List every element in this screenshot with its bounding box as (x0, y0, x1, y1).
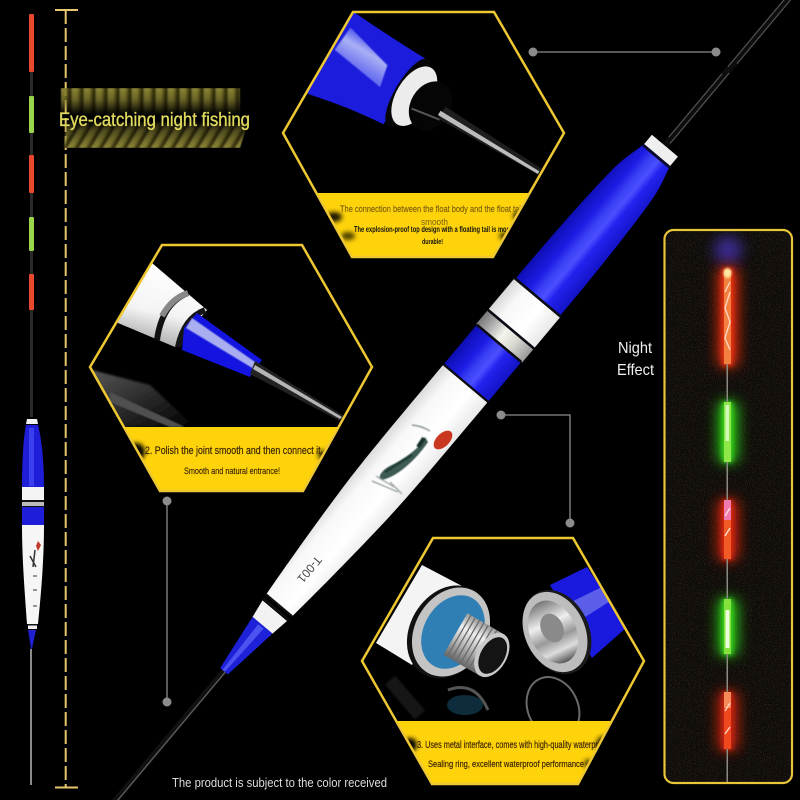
top caption text: The connection between the float body and the float tail is (340, 204, 530, 215)
top caption text: durable! (422, 237, 443, 246)
middle caption text (145, 445, 323, 476)
lower collar rings (263, 594, 292, 620)
lit red segment two (724, 500, 731, 559)
panel frame (664, 230, 792, 783)
photo of metal interface (376, 565, 624, 721)
hexagon panel: polished joint (85, 245, 380, 491)
night effect panel (664, 230, 792, 783)
lower blue band (443, 325, 521, 402)
ink painting and seal on float (372, 425, 456, 494)
blue cone tip (214, 617, 273, 680)
banner: eye-catching night fishing (59, 88, 250, 148)
lit red segment one (724, 268, 732, 364)
photo of polished joint (92, 263, 344, 427)
model number: T-001 (294, 553, 325, 586)
bottom caption text: Sealing ring, excellent waterproof performance (428, 759, 584, 770)
antenna thread (726, 364, 728, 783)
lower white body (257, 365, 487, 624)
white band (488, 278, 561, 348)
banner: eye-catching night fishing: Eye-catching night fishing (59, 110, 250, 131)
red seal (430, 427, 456, 453)
top white ring (644, 135, 678, 167)
dimension line with end caps (55, 10, 78, 788)
night effect label: Night (618, 340, 652, 357)
night effect label (617, 340, 654, 379)
hexagon panel: metal interface (360, 538, 650, 784)
top caption text: The explosion-proof top design with a floating tail is more (354, 225, 512, 234)
bottom caption text: 3. Uses metal interface, comes with high-quality waterproof (417, 740, 608, 751)
middle caption text: Smooth and natural entrance! (184, 466, 280, 476)
top caption text: smooth (421, 217, 448, 227)
leader line middle (496, 410, 574, 528)
top caption band (318, 193, 528, 256)
leader line left (162, 496, 172, 706)
top caption text (340, 205, 520, 244)
footer note: The product is subject to the color received (172, 775, 387, 790)
silver ring (476, 310, 534, 363)
glow halos (714, 236, 742, 750)
left float body (22, 419, 44, 649)
bottom caption text (417, 740, 608, 770)
left float glow segments (29, 14, 34, 310)
photo of top joint (307, 13, 541, 174)
full float at left (22, 14, 44, 785)
night effect label: Effect (617, 362, 654, 379)
middle caption band (125, 427, 338, 490)
upper blue body (515, 137, 679, 316)
leader line top (528, 48, 720, 56)
middle caption text: 2. Polish the joint smooth and then connect it. (145, 445, 323, 457)
hexagon panel: top connection (282, 10, 566, 258)
lit red segment three (724, 692, 731, 749)
lit green segment two (724, 599, 731, 654)
bottom caption band (398, 721, 610, 783)
black separator lines (443, 278, 561, 402)
lower stem (108, 667, 228, 800)
lit green segment one (724, 402, 731, 462)
upper antenna rod (658, 0, 794, 153)
